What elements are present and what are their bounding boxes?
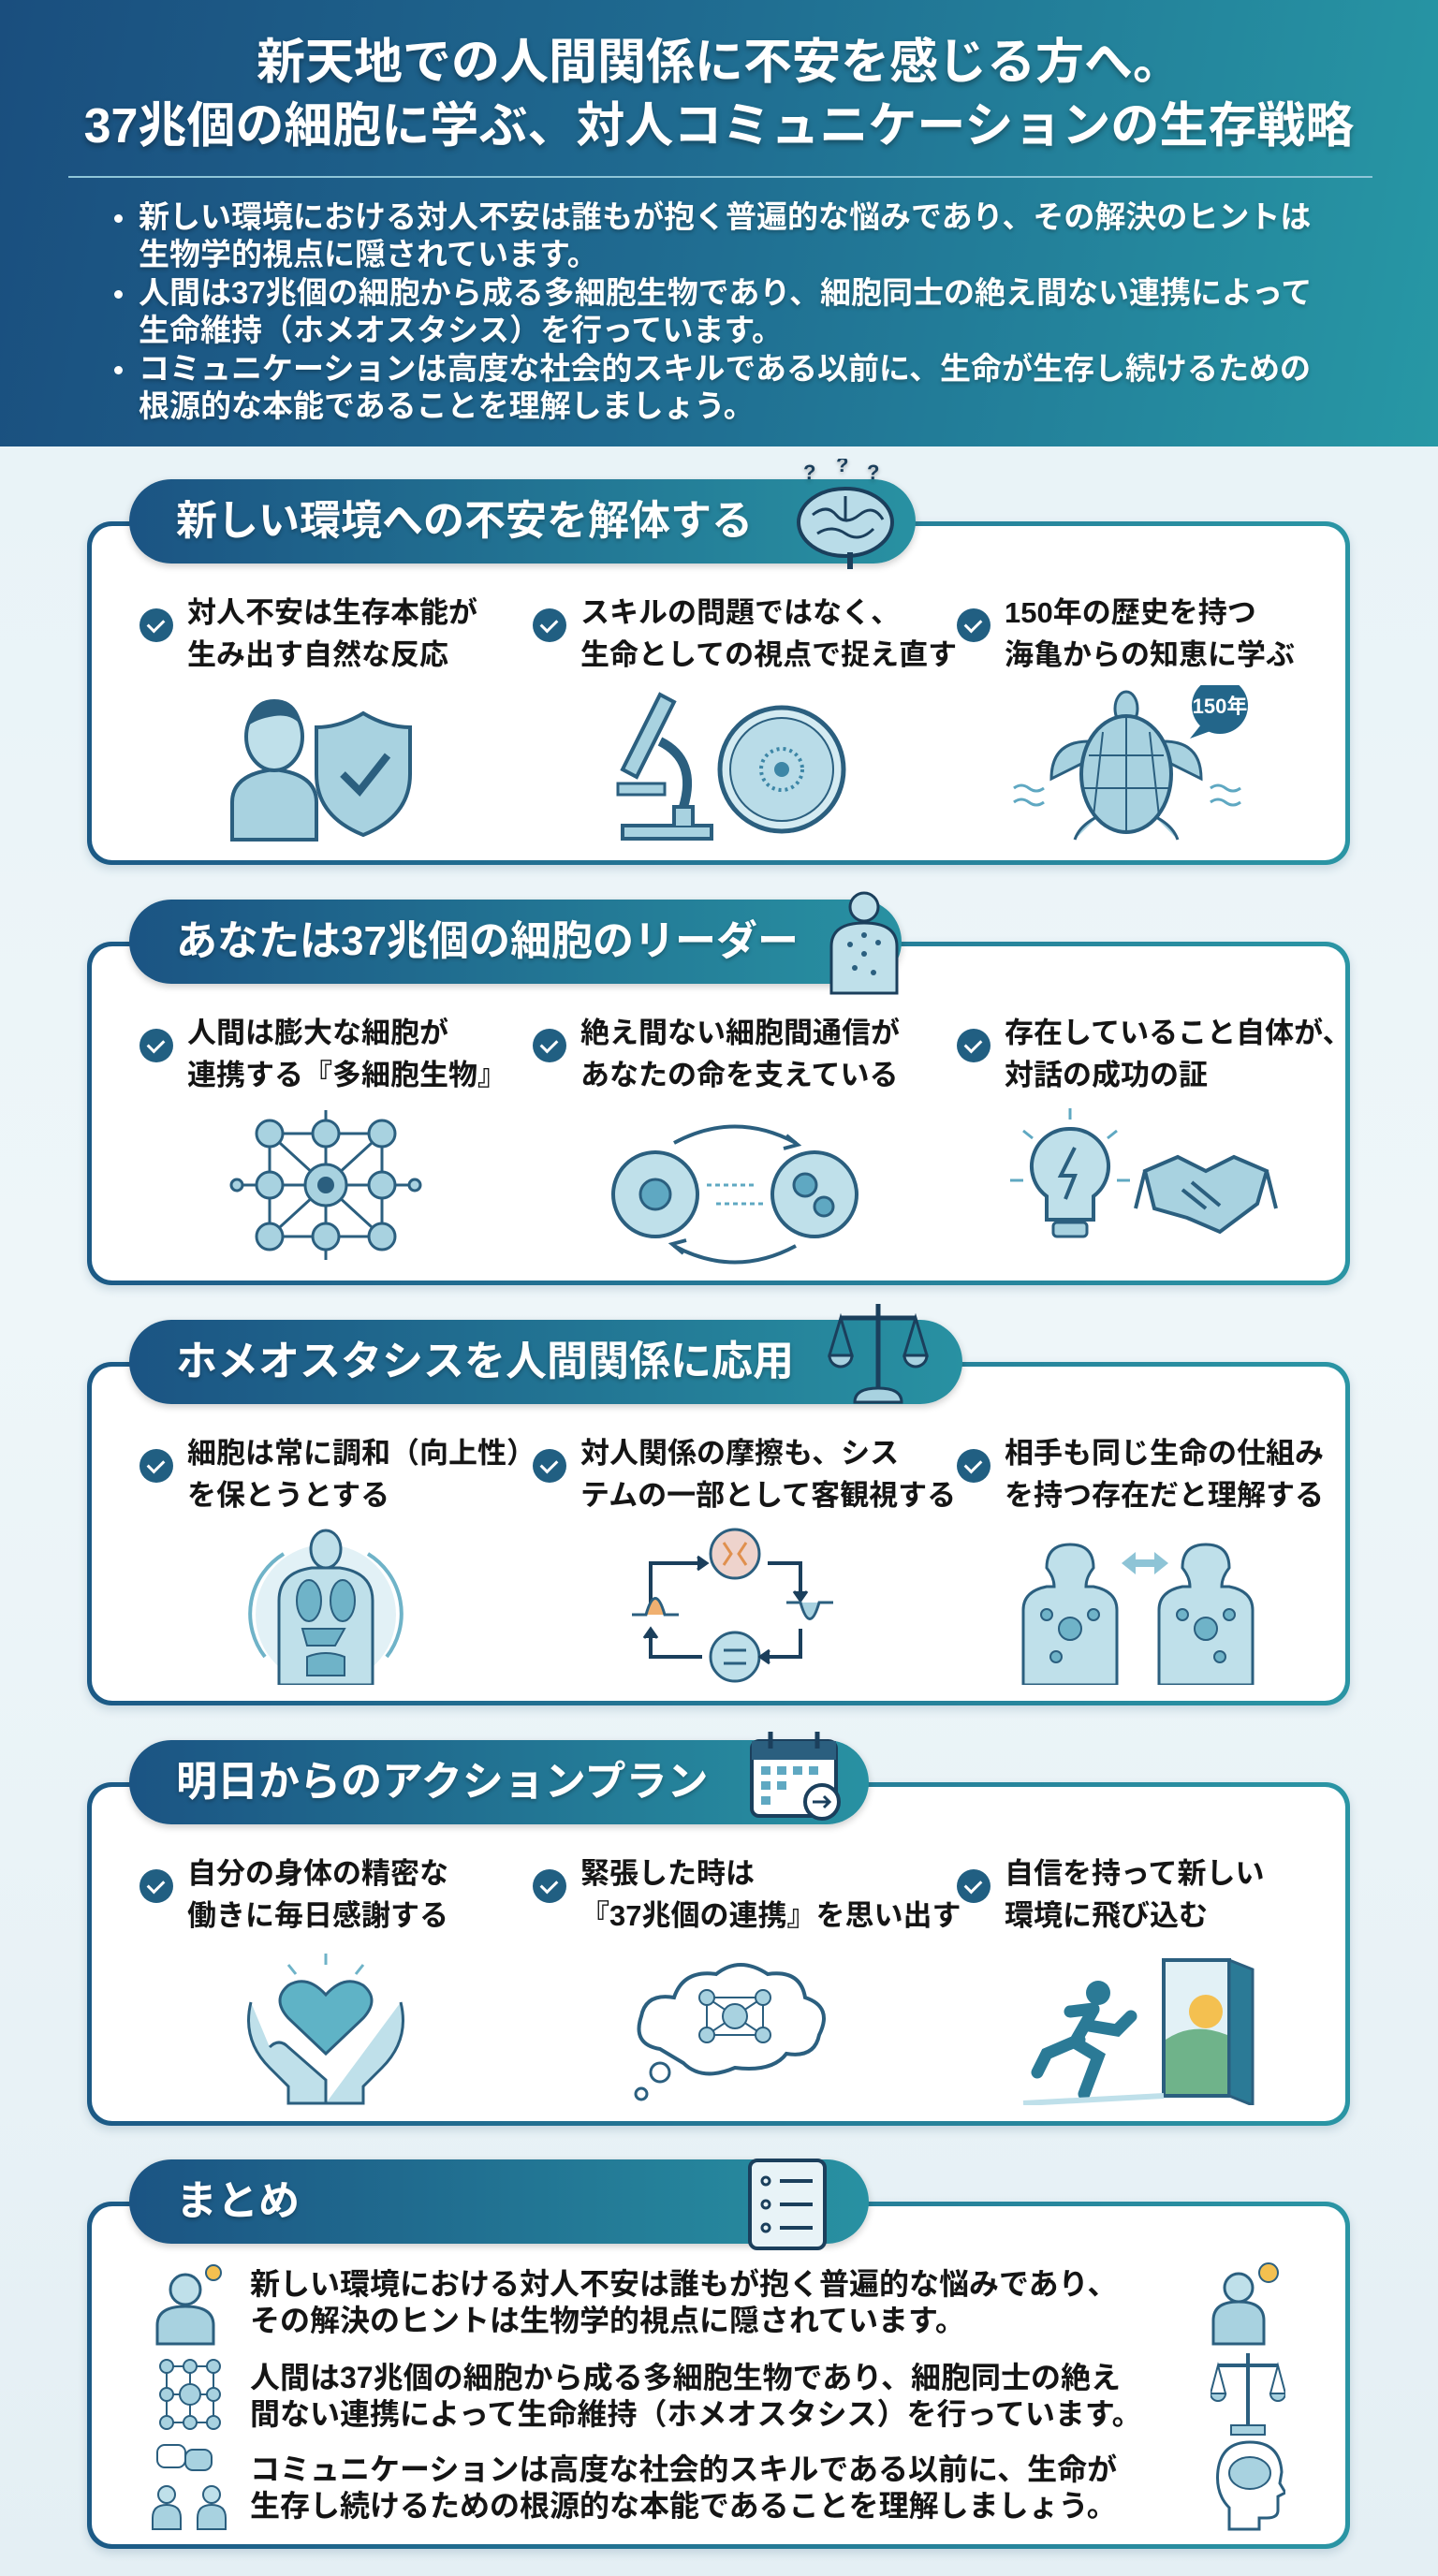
item: 調和: を保とうとする bbox=[187, 1479, 389, 1512]
icon: scale bbox=[1211, 2349, 1285, 2437]
item: 37兆個の連携: 『37兆個の連携』を思い出す bbox=[580, 1899, 961, 1932]
intro bullets: コミュニケーションは高度な社会的スキルである以前に、生命が生存し続けるための bbox=[139, 351, 1311, 386]
icon: sea turtle with 150年 bubble: 150年 bbox=[1193, 695, 1247, 718]
intro bullets: 人間は37兆個の細胞から成る多細胞生物であり、細胞同士の絶え間ない連携によって bbox=[139, 275, 1312, 310]
summary 1: その解決のヒントは生物学的視点に隠されています。 bbox=[250, 2304, 965, 2337]
item: 37兆個の連携: 緊張した時は bbox=[580, 1857, 755, 1890]
item: スキルの問題: スキルの問題ではなく、 bbox=[580, 596, 900, 629]
icon: sea turtle with 150年 bubble bbox=[1013, 685, 1248, 841]
item: 摩擦: テムの一部として客観視する bbox=[580, 1479, 956, 1512]
icon: cell-to-cell communication bbox=[611, 1125, 858, 1264]
summary 3 bbox=[143, 2452, 1304, 2536]
item: 飛び込む: 自信を持って新しい bbox=[1005, 1857, 1264, 1890]
item: スキルの問題: 生命としての視点で捉え直す bbox=[580, 638, 957, 671]
item: スキルの問題 bbox=[533, 596, 957, 671]
item: 対話の成功の証: 対話の成功の証 bbox=[1005, 1059, 1208, 1091]
panel: 新しい環境への不安を解体する bbox=[83, 459, 1354, 872]
icon: running into door bbox=[1022, 1958, 1255, 2105]
item: 相手: を持つ存在だと理解する bbox=[1005, 1479, 1324, 1512]
item: 対人不安: 対人不安は生存本能が bbox=[187, 596, 477, 629]
icon: person with idea bbox=[1211, 2262, 1279, 2346]
intro bullets: 生物学的視点に隠されています。 bbox=[139, 237, 598, 271]
summary 1 bbox=[155, 2262, 1279, 2346]
item: 細胞間通信: あなたの命を支えている bbox=[580, 1059, 898, 1091]
panel: 明日からのアクションプラン bbox=[83, 1732, 1354, 2133]
heading pill: まとめ bbox=[176, 2178, 300, 2224]
icon: two bodies with double arrow bbox=[1022, 1543, 1255, 1685]
item: 細胞間通信 bbox=[533, 1017, 900, 1091]
item: 150年: 海亀からの知恵に学ぶ bbox=[1005, 638, 1295, 671]
item: 対人不安 bbox=[139, 596, 477, 671]
panel: まとめ bbox=[83, 2159, 1354, 2556]
item: 調和 bbox=[139, 1437, 536, 1512]
item: 対話の成功の証: 存在していること自体が、 bbox=[1005, 1017, 1351, 1049]
item: 調和: 細胞は常に調和（向上性） bbox=[187, 1437, 536, 1470]
item: 多細胞生物: 連携する『多細胞生物』 bbox=[187, 1059, 506, 1091]
icon: microscope and petri dish bbox=[616, 692, 846, 841]
intro bullets bbox=[114, 199, 1312, 423]
header banner bbox=[0, 0, 1438, 446]
heading pill bbox=[129, 900, 902, 984]
item: 相手: 相手も同じ生命の仕組み bbox=[1005, 1437, 1324, 1470]
item: 対人不安: 生み出す自然な反応 bbox=[187, 638, 448, 671]
item: 対話の成功の証 bbox=[957, 1017, 1351, 1091]
item: 150年 bbox=[957, 596, 1295, 671]
item: 多細胞生物 bbox=[139, 1017, 506, 1091]
item: 摩擦 bbox=[533, 1437, 956, 1512]
item: 飛び込む: 環境に飛び込む bbox=[1005, 1899, 1208, 1932]
summary 3: コミュニケーションは高度な社会的スキルである以前に、生命が bbox=[250, 2452, 1117, 2486]
summary 2: 人間は37兆個の細胞から成る多細胞生物であり、細胞同士の絶え bbox=[250, 2361, 1121, 2394]
heading pill bbox=[129, 1320, 962, 1404]
summary 1: 新しい環境における対人不安は誰もが抱く普遍的な悩みであり、 bbox=[250, 2267, 1117, 2301]
icon: person with shield bbox=[230, 699, 412, 842]
item: 感謝: 自分の身体の精密な bbox=[187, 1857, 448, 1890]
icon: brain with question marks: ? bbox=[867, 461, 879, 484]
panel: あなたは37兆個の細胞のリーダー bbox=[83, 891, 1354, 1293]
heading pill: あなたは37兆個の細胞のリーダー bbox=[176, 918, 799, 964]
title: 37兆個の細胞に学ぶ、対人コミュニケーションの生存戦略 bbox=[84, 99, 1354, 154]
summary 2 bbox=[143, 2360, 1304, 2444]
heading pill bbox=[129, 2159, 869, 2244]
icon: brain with question marks: ? bbox=[803, 461, 815, 484]
item: 摩擦: 対人関係の摩擦も、シス bbox=[580, 1437, 899, 1470]
panel: ホメオスタシスを人間関係に応用 bbox=[83, 1304, 1354, 1713]
icon: cell network bbox=[230, 1110, 421, 1260]
title bbox=[84, 36, 1355, 154]
item: 150年: 150年の歴史を持つ bbox=[1005, 596, 1256, 629]
heading pill: 新しい環境への不安を解体する bbox=[176, 498, 753, 544]
title: 新天地での人間関係に不安を感じる方へ。 bbox=[257, 36, 1181, 90]
icon: lightbulb and handshake bbox=[1010, 1108, 1278, 1237]
summary 2: 間ない連携によって生命維持（ホメオスタシス）を行っています。 bbox=[250, 2397, 1142, 2431]
item: 多細胞生物: 人間は膨大な細胞が bbox=[187, 1017, 448, 1049]
item: 感謝: 働きに毎日感謝する bbox=[187, 1899, 448, 1932]
icon: heart in hands bbox=[247, 1954, 404, 2104]
icon: brain with question marks bbox=[797, 459, 894, 569]
icon: calendar bbox=[750, 1732, 841, 1821]
item: 37兆個の連携 bbox=[533, 1857, 961, 1932]
item: 飛び込む bbox=[957, 1857, 1264, 1932]
icon: body with organs bbox=[248, 1530, 404, 1685]
heading pill: ホメオスタシスを人間関係に応用 bbox=[176, 1339, 794, 1384]
heading pill bbox=[129, 479, 916, 564]
icon: feedback cycle bbox=[632, 1528, 833, 1683]
heading pill: 明日からのアクションプラン bbox=[176, 1759, 708, 1805]
icon: human body with cells bbox=[829, 891, 899, 994]
intro bullets: 生命維持（ホメオスタシス）を行っています。 bbox=[139, 313, 783, 347]
icon: head with brain bbox=[1211, 2437, 1285, 2531]
intro bullets: 新しい環境における対人不安は誰もが抱く普遍的な悩みであり、その解決のヒントは bbox=[139, 199, 1311, 234]
icon: balance scale bbox=[828, 1304, 929, 1404]
intro bullets: 根源的な本能であることを理解しましょう。 bbox=[139, 388, 755, 423]
icon: thought cloud with network bbox=[635, 1963, 826, 2100]
summary 3: 生存し続けるための根源的な本能であることを理解しましょう。 bbox=[250, 2489, 1117, 2523]
item: 細胞間通信: 絶え間ない細胞間通信が bbox=[580, 1017, 900, 1049]
heading pill bbox=[129, 1740, 869, 1824]
item: 相手 bbox=[957, 1437, 1324, 1512]
item: 感謝 bbox=[139, 1857, 448, 1932]
icon: checklist bbox=[748, 2159, 827, 2250]
